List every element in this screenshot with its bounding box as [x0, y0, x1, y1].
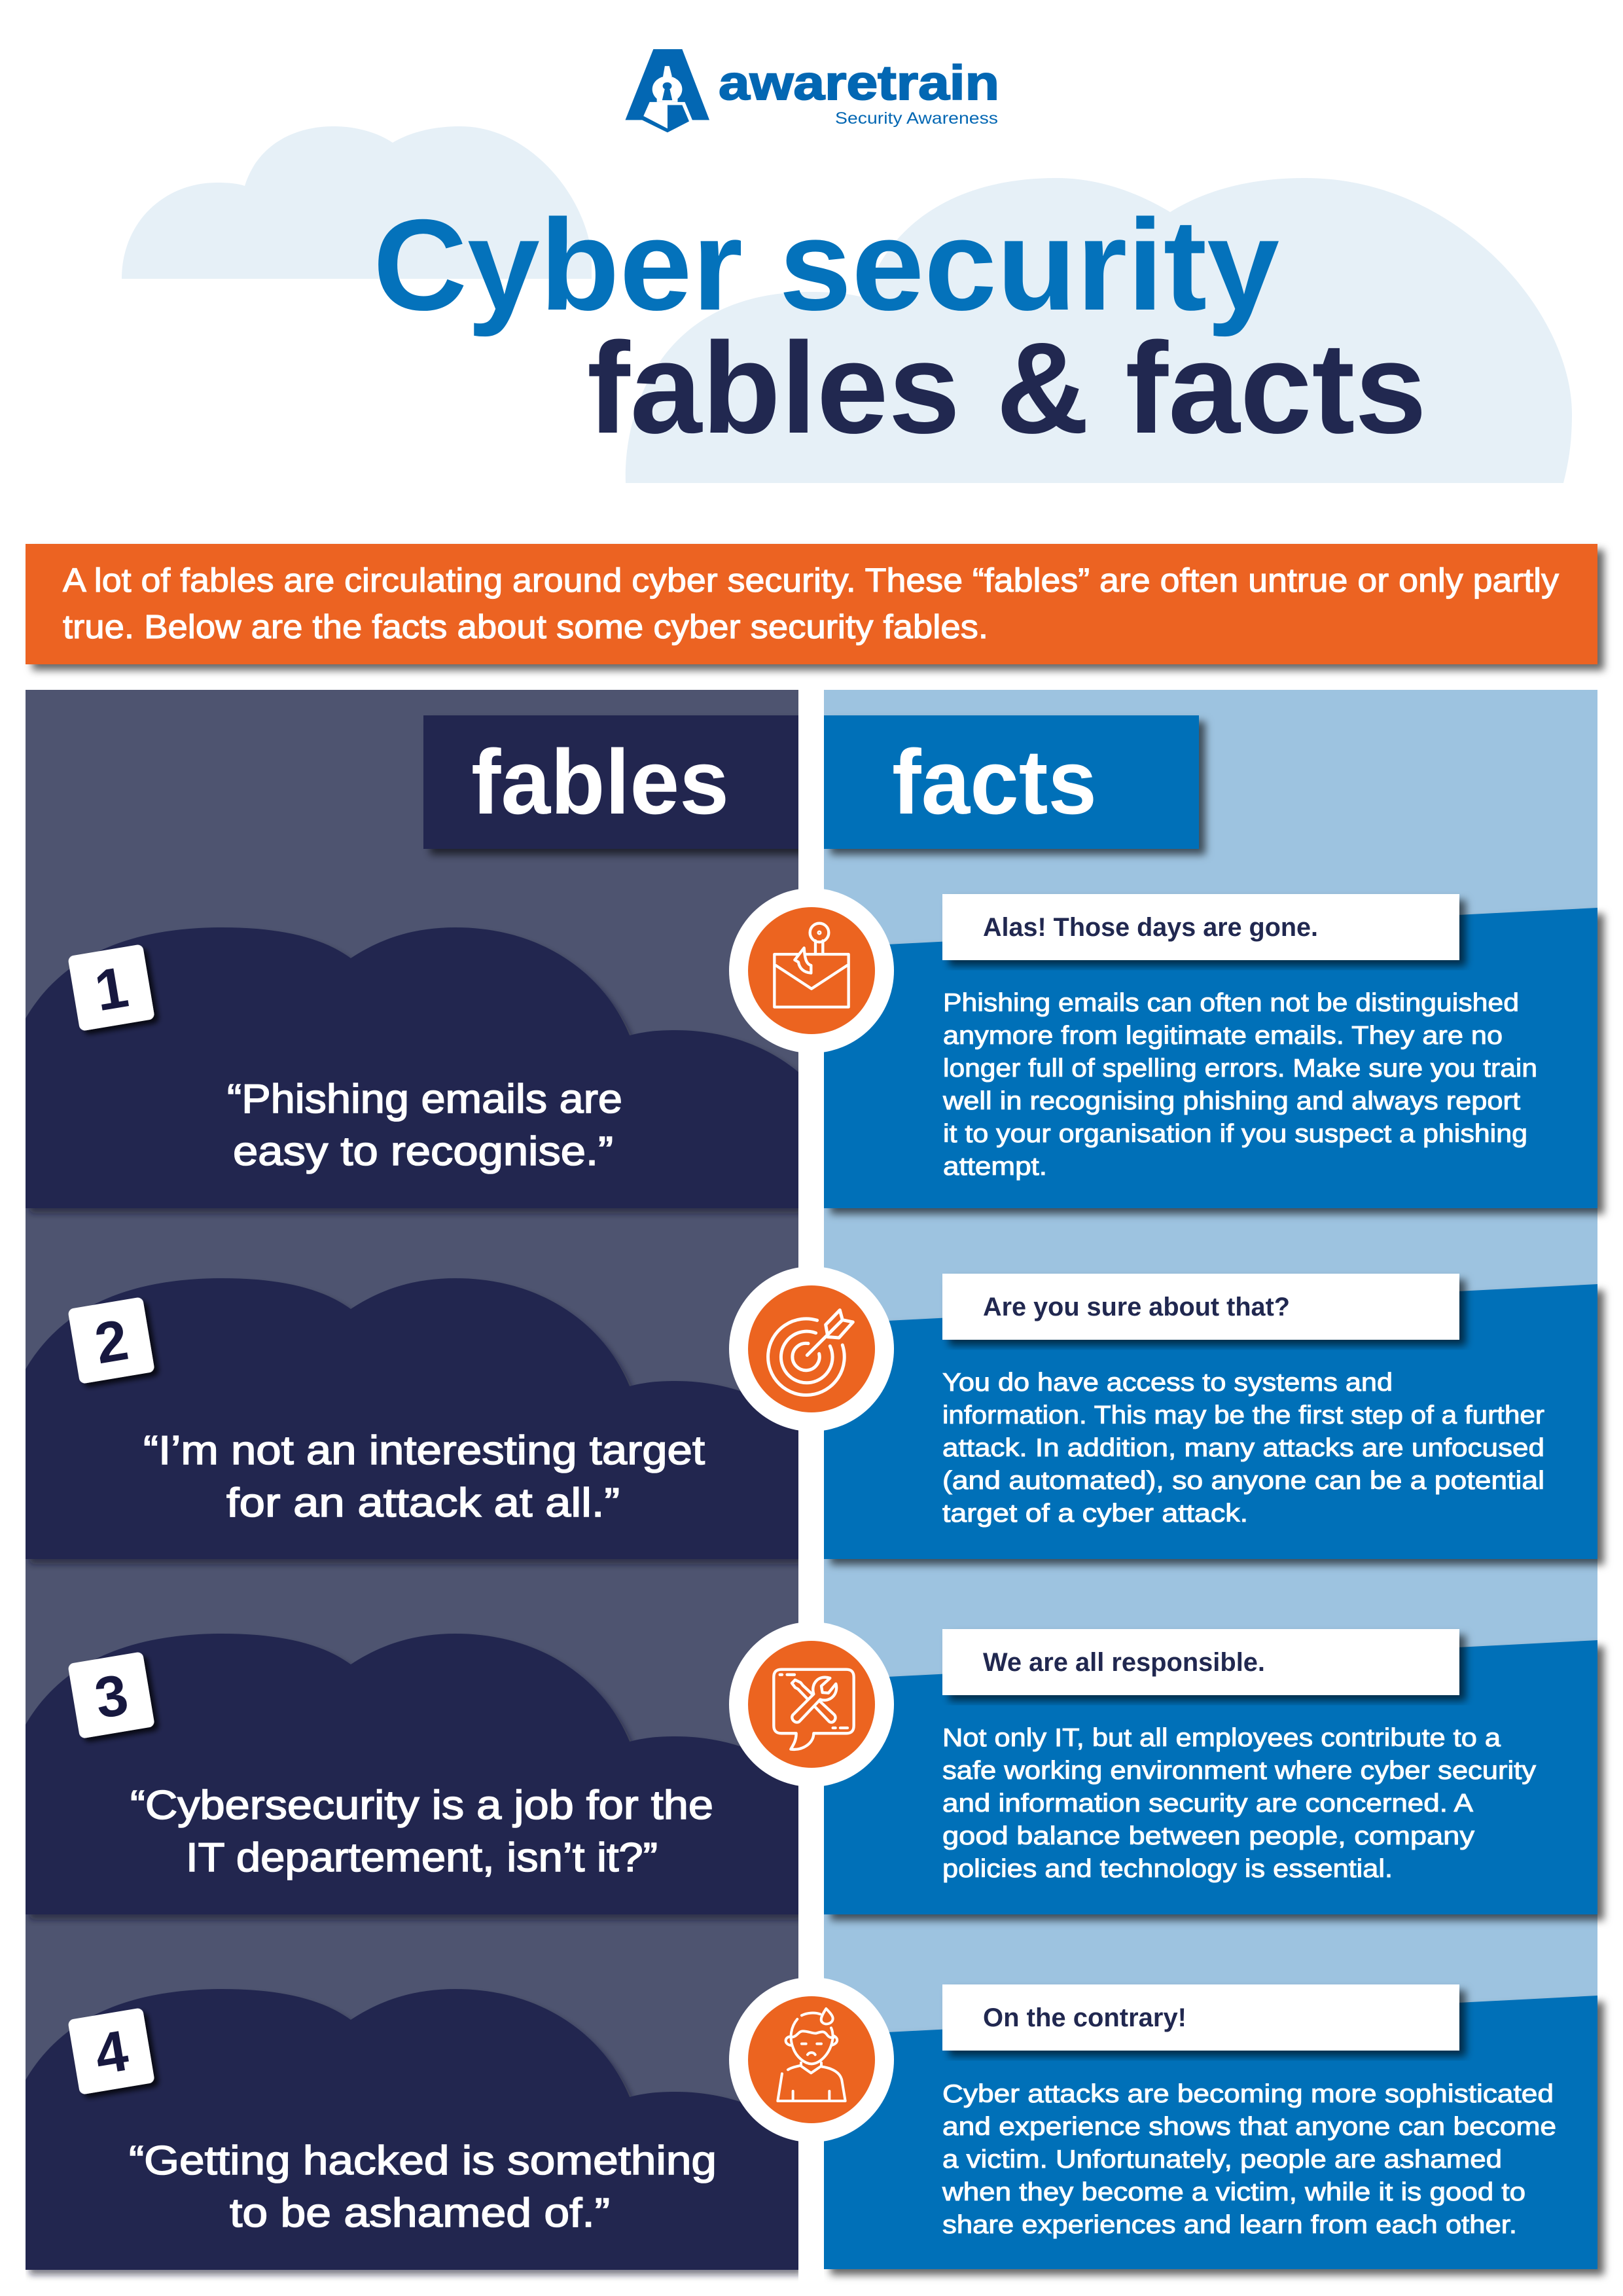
- fact 1: attempt.: [943, 1153, 1047, 1181]
- fact 1: anymore from legitimate emails. They are no: [943, 1022, 1503, 1050]
- fable 3: “Cybersecurity is a job for the: [130, 1783, 713, 1828]
- panel: fables column: [26, 690, 798, 2270]
- fable 1: “Phishing emails are: [227, 1077, 622, 1122]
- column background: [26, 690, 798, 2269]
- fable 2: [26, 1278, 798, 1559]
- icon: tools in speech bubble: [729, 1622, 894, 1787]
- fable 3: [26, 1634, 798, 1914]
- title line 1: Cyber security: [373, 192, 1279, 337]
- fact 3: safe working environment where cyber security: [942, 1757, 1537, 1785]
- fables tab: fables: [471, 730, 729, 833]
- fable 1: easy to recognise.”: [233, 1129, 613, 1174]
- fable 3: 3: [90, 1662, 133, 1731]
- fable 1: 1: [90, 954, 133, 1023]
- fable 4: “Getting hacked is something: [129, 2138, 717, 2183]
- fact 4: and experience shows that anyone can become: [942, 2113, 1556, 2141]
- title line 2: fables & facts: [587, 315, 1427, 460]
- fact 3: Not only IT, but all employees contribute to a: [942, 1724, 1501, 1752]
- banner text: [63, 562, 1560, 645]
- title: [373, 192, 1427, 460]
- fact 3: good balance between people, company: [942, 1822, 1475, 1850]
- banner background: [26, 544, 1597, 664]
- fact 2: Are you sure about that?: [983, 1293, 1290, 1321]
- fable 2: “I’m not an interesting target: [143, 1428, 705, 1473]
- logo wordmark: awaretrain: [719, 56, 999, 110]
- fable 3: IT departement, isn’t it?”: [186, 1835, 658, 1880]
- fact 2: information. This may be the first step of a further: [942, 1401, 1544, 1429]
- banner text: true. Below are the facts about some cyber security fables.: [63, 608, 988, 645]
- background cloud: small: [122, 126, 592, 279]
- fact 2: attack. In addition, many attacks are unfocused: [942, 1434, 1544, 1462]
- fact 2: You do have access to systems and: [942, 1369, 1393, 1397]
- icon: target with arrow: [729, 1266, 894, 1431]
- fact 1: well in recognising phishing and always report: [942, 1087, 1520, 1115]
- fact 4: when they become a victim, while it is good to: [942, 2178, 1525, 2206]
- fact 2: [824, 1274, 1597, 1559]
- intro banner: [26, 544, 1597, 664]
- fable 4: [26, 1989, 798, 2270]
- fable 2: 2: [90, 1307, 133, 1376]
- fact 1: Phishing emails can often not be distinguished: [943, 989, 1519, 1017]
- fact 3: [824, 1629, 1597, 1914]
- fact 1: [824, 894, 1597, 1208]
- logo tagline: Security Awareness: [835, 109, 998, 128]
- fact 1: it to your organisation if you suspect a phishing: [943, 1120, 1527, 1148]
- logo icon: keyhole A: [625, 49, 709, 132]
- fact 3: policies and technology is essential.: [942, 1855, 1393, 1883]
- fact 1: longer full of spelling errors. Make sure you train: [943, 1054, 1537, 1083]
- fact 2: target of a cyber attack.: [942, 1499, 1248, 1528]
- fact 4: On the contrary!: [983, 2003, 1186, 2032]
- fables tab: [423, 715, 798, 849]
- fact 4: [824, 1984, 1597, 2269]
- panel: facts column: [824, 690, 1597, 2269]
- fable 1: [26, 927, 798, 1208]
- logo: awaretrain: [625, 49, 999, 132]
- fact 3: and information security are concerned. A: [942, 1789, 1473, 1818]
- center divider strip: [798, 690, 824, 2296]
- facts tab: facts: [892, 730, 1097, 833]
- column background: [824, 690, 1597, 2269]
- fact 4: share experiences and learn from each other.: [942, 2211, 1517, 2239]
- fact 3: We are all responsible.: [983, 1648, 1265, 1677]
- facts tab: [824, 715, 1199, 849]
- fable 4: 4: [90, 2018, 133, 2087]
- icon: phishing email: [729, 888, 894, 1053]
- banner text: A lot of fables are circulating around cyber security. These “fables” are often untrue or only partly: [63, 562, 1560, 599]
- fable 4: to be ashamed of.”: [230, 2191, 610, 2236]
- icon: ashamed person: [729, 1977, 894, 2142]
- fact 2: (and automated), so anyone can be a potential: [942, 1467, 1544, 1495]
- fable 2: for an attack at all.”: [226, 1480, 620, 1526]
- fact 4: a victim. Unfortunately, people are ashamed: [942, 2145, 1502, 2174]
- background cloud: large: [626, 178, 1572, 483]
- fact 4: Cyber attacks are becoming more sophisticated: [942, 2080, 1554, 2108]
- fact 1: Alas! Those days are gone.: [983, 913, 1318, 942]
